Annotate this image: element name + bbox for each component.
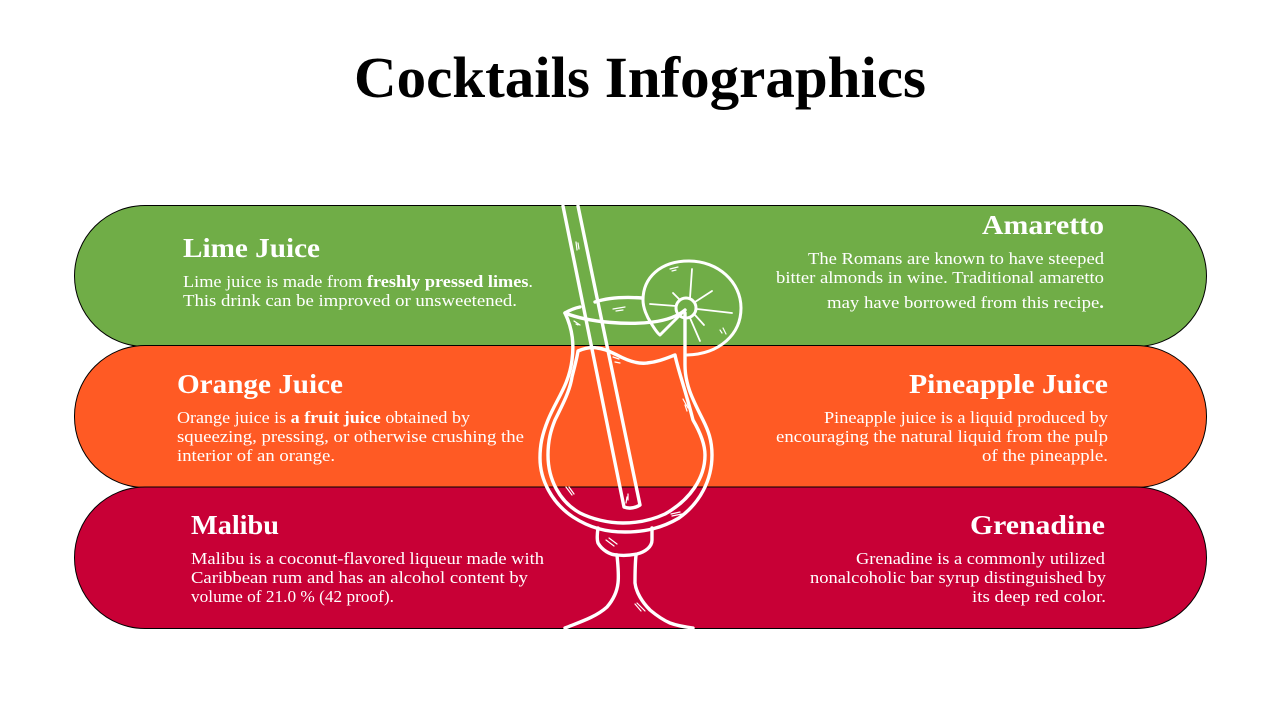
lime slice <box>643 261 741 355</box>
liquid outline <box>548 348 705 523</box>
orange juice text: Orange juice is a fruit juice obtained by <box>177 408 471 427</box>
straw <box>563 206 640 508</box>
red pill <box>74 487 1206 628</box>
amaretto heading: Amaretto <box>982 209 1104 240</box>
grenadine text: Grenadine is a commonly utilized <box>856 549 1106 568</box>
malibu text <box>191 549 545 606</box>
amaretto text: The Romans are known to have steeped <box>808 249 1105 268</box>
glass highlights <box>566 307 688 611</box>
lime juice text: This drink can be improved or unsweetened. <box>183 291 517 310</box>
panel: orange juice and pineapple juice <box>74 346 1206 488</box>
orange juice heading: Orange Juice <box>177 368 343 399</box>
lime juice text: Lime juice is made from freshly pressed limes . <box>183 272 533 291</box>
lime juice heading: Lime Juice <box>183 232 320 263</box>
green pill <box>74 206 1206 346</box>
grenadine text: nonalcoholic bar syrup distinguished by <box>810 568 1107 587</box>
pineapple juice text: Pineapple juice is a liquid produced by <box>824 408 1109 427</box>
pineapple juice text <box>776 408 1109 465</box>
malibu text: Caribbean rum and has an alcohol content by <box>191 568 529 587</box>
orange juice text: interior of an orange. <box>177 446 335 465</box>
pineapple juice text: encouraging the natural liquid from the pulp <box>776 427 1108 446</box>
lime juice text <box>183 272 533 310</box>
amaretto text <box>776 249 1105 312</box>
pineapple juice text: of the pineapple. <box>982 446 1108 465</box>
amaretto text: bitter almonds in wine. Traditional amaretto <box>776 268 1104 287</box>
icon: cocktail glass with straw and lime <box>540 206 741 628</box>
orange juice text <box>177 408 524 465</box>
grenadine text <box>810 549 1107 606</box>
glass stem and foot <box>565 528 693 628</box>
pineapple juice heading: Pineapple Juice <box>909 368 1108 399</box>
grenadine text: its deep red color. <box>972 587 1106 606</box>
malibu text: volume of 21.0 % (42 proof). <box>191 587 394 606</box>
panel: malibu and grenadine <box>74 487 1206 628</box>
malibu heading: Malibu <box>191 509 279 540</box>
amaretto text: may have borrowed from this recipe . <box>827 293 1104 312</box>
orange pill <box>74 346 1206 488</box>
orange juice text: squeezing, pressing, or otherwise crushing the <box>177 427 524 446</box>
glass rim <box>565 297 685 323</box>
malibu text: Malibu is a coconut-flavored liqueur made with <box>191 549 545 568</box>
title: Cocktails Infographics <box>354 45 926 110</box>
grenadine heading: Grenadine <box>970 509 1105 540</box>
panel: lime juice and amaretto <box>74 206 1206 346</box>
glass bowl outer <box>540 313 712 532</box>
